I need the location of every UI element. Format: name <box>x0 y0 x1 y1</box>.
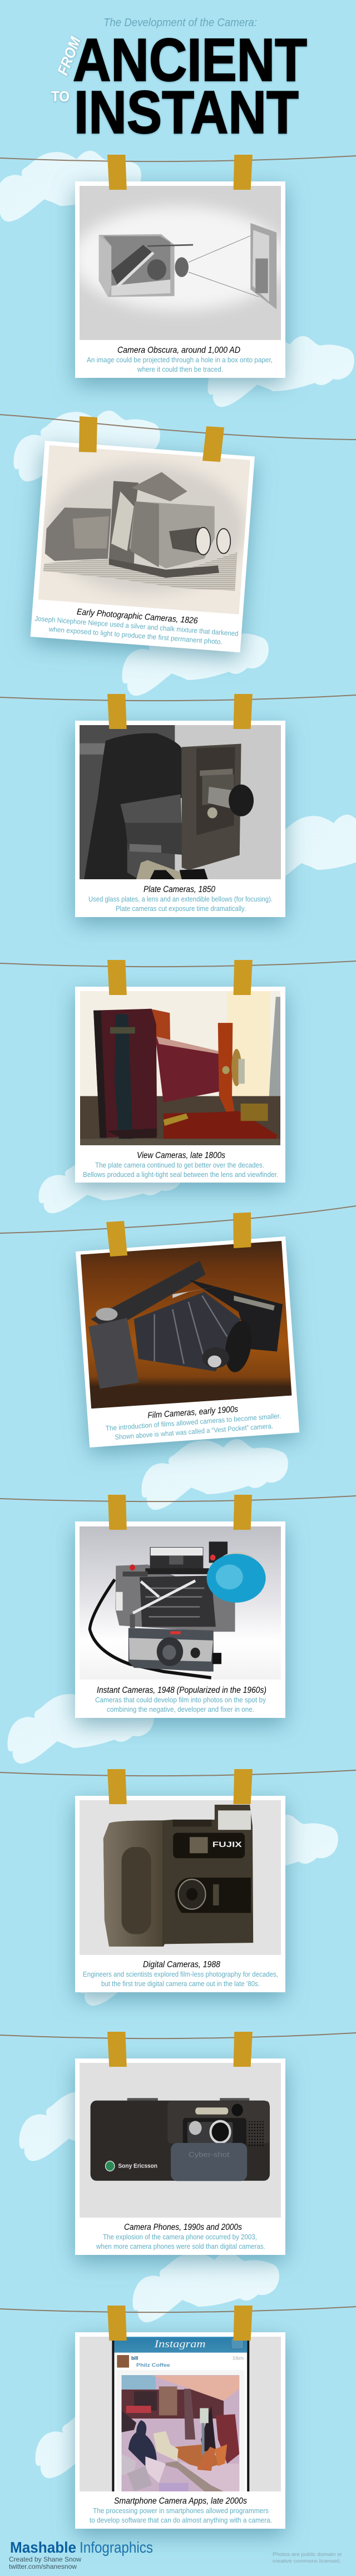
rope 3 <box>0 695 356 701</box>
rope 7 <box>0 1770 356 1776</box>
clothespins <box>107 960 253 995</box>
clothespins <box>107 2032 253 2067</box>
rope 2 <box>0 415 356 440</box>
caption <box>95 1686 266 1713</box>
card frame <box>75 987 285 1183</box>
caption: Camera Phones, 1990s and 2000s <box>124 2223 242 2232</box>
heading word: ancient: ANCIENT <box>73 26 307 94</box>
caption: combining the negative, developer and fixer in one. <box>107 1706 254 1713</box>
photo: fujix digital camera <box>80 1800 281 1955</box>
photo: view camera <box>80 991 280 1145</box>
photo: instagram on a smartphone <box>80 2337 281 2491</box>
caption: Plate cameras cut exposure time dramatically. <box>116 905 246 913</box>
caption: when exposed to light to produce the first permanent photo. <box>48 625 222 646</box>
footer: photo licence note <box>273 2552 342 2564</box>
photo: vest pocket film camera <box>77 1237 295 1411</box>
rope 4 <box>0 961 356 967</box>
caption: Film Cameras, early 1900s <box>147 1405 239 1420</box>
caption: Smartphone Camera Apps, late 2000s <box>114 2496 247 2506</box>
card frame <box>75 721 285 917</box>
twitter credit: twitter.com/shanesnow <box>9 2563 77 2570</box>
photo: instagram on a smartphone: Philz Coffee <box>136 2362 170 2368</box>
photo: instagram on a smartphone: 16m <box>233 2355 244 2361</box>
caption: to develop software that can do almost anything with a camera. <box>90 2516 272 2524</box>
infographics wordmark: Infographics <box>80 2539 153 2556</box>
caption: The plate camera continued to get better over the decades. <box>95 1161 264 1169</box>
caption: but the first true digital camera came out in the late ’80s. <box>101 1980 260 1988</box>
caption: Camera Obscura, around 1,000 AD <box>117 346 240 355</box>
subtitle: The Development of the Camera: <box>103 17 257 29</box>
footer: photo licence note: Photos are public domain or <box>273 2552 342 2558</box>
caption <box>88 885 273 913</box>
photo: sony ericsson camera phone: Sony Ericsson <box>118 2163 157 2170</box>
caption <box>90 2496 272 2524</box>
panel: smartphone camera apps <box>75 2306 285 2529</box>
card frame <box>75 181 285 378</box>
rope 1 <box>0 156 356 161</box>
footer: mashable credits <box>9 2539 153 2570</box>
caption: Early Photographic Cameras, 1826 <box>76 607 198 625</box>
photo: instagram on a smartphone: Instagram <box>154 2338 206 2350</box>
clothespins <box>108 1495 252 1530</box>
clothespins <box>107 1769 253 1804</box>
caption <box>96 2223 265 2250</box>
caption: Engineers and scientists explored film-less photography for decades, <box>83 1971 278 1978</box>
photo: sony ericsson camera phone <box>80 2063 281 2218</box>
caption <box>83 1960 278 1988</box>
caption: The explosion of the camera phone occurred by 2003, <box>103 2233 257 2241</box>
panel: film cameras <box>76 1213 299 1447</box>
caption: Shown above is what was called a “Vest Pocket” camera. <box>115 1422 273 1441</box>
photo: early stereo camera engraving <box>34 439 254 618</box>
caption: Instant Cameras, 1948 (Popularized in the 1960s) <box>97 1686 266 1695</box>
caption: Digital Cameras, 1988 <box>143 1960 220 1969</box>
clothespins <box>107 694 253 729</box>
panel: camera obscura <box>73 155 286 378</box>
heading word: from: FROM <box>55 35 84 77</box>
rope 5 <box>0 1206 356 1233</box>
caption: Joseph Nicephore Niepce used a silver and chalk mixture that darkened <box>34 615 239 638</box>
caption: where it could then be traced. <box>137 366 223 373</box>
caption <box>87 346 273 373</box>
clothespins <box>79 416 224 462</box>
panel: plate cameras <box>75 694 285 917</box>
panel: camera phones <box>75 2032 285 2255</box>
card frame <box>31 441 255 652</box>
card frame <box>75 1796 285 1992</box>
photo: plate camera <box>80 725 281 879</box>
rope 8 <box>0 2033 356 2038</box>
photo: fujix digital camera: FUJIX <box>212 1840 242 1849</box>
rope 6 <box>0 1496 356 1501</box>
panel: early photographic cameras <box>31 416 255 652</box>
photo: sony ericsson camera phone: Cyber-shot <box>189 2150 230 2159</box>
panel: digital cameras <box>75 1769 285 1992</box>
caption: Used glass plates, a lens and an extendible bellows (for focusing). <box>88 895 273 903</box>
author credit: Created by Shane Snow <box>9 2555 81 2563</box>
caption <box>105 1401 282 1442</box>
caption <box>83 1151 278 1179</box>
caption: Cameras that could develop film into photos on the spot by <box>95 1696 266 1704</box>
card frame <box>75 2332 285 2529</box>
mashable logo: Mashable <box>10 2539 76 2556</box>
clothespins <box>106 1213 251 1257</box>
footer: photo licence note: creative commons licensed. <box>273 2558 341 2564</box>
panel: view cameras <box>75 960 285 1183</box>
card frame <box>76 1237 299 1447</box>
rope 9 <box>0 2307 356 2312</box>
clothespins <box>107 2306 253 2341</box>
caption: when more camera phones were sold than digital cameras. <box>96 2243 265 2250</box>
caption: Plate Cameras, 1850 <box>144 885 215 894</box>
photo: polaroid camera <box>80 1526 281 1679</box>
panel: instant cameras <box>75 1495 285 1718</box>
caption: The processing power in smartphones allowed programmers <box>93 2507 269 2515</box>
clothespins <box>107 155 253 190</box>
photo: instagram on a smartphone: bill <box>131 2355 138 2361</box>
caption <box>34 604 239 647</box>
card frame <box>75 1521 285 1718</box>
photo: camera obscura engraving <box>80 186 281 340</box>
caption: An image could be projected through a hole in a box onto paper, <box>87 356 273 364</box>
heading word: instant: INSTANT <box>74 78 299 146</box>
caption: View Cameras, late 1800s <box>137 1151 225 1160</box>
heading word: to: TO <box>51 88 70 105</box>
caption: Bellows produced a light-tight seal between the lens and viewfinder. <box>83 1171 278 1179</box>
caption: The introduction of films allowed cameras to become smaller. <box>105 1412 281 1432</box>
title block <box>51 17 307 146</box>
card frame <box>75 2058 285 2255</box>
